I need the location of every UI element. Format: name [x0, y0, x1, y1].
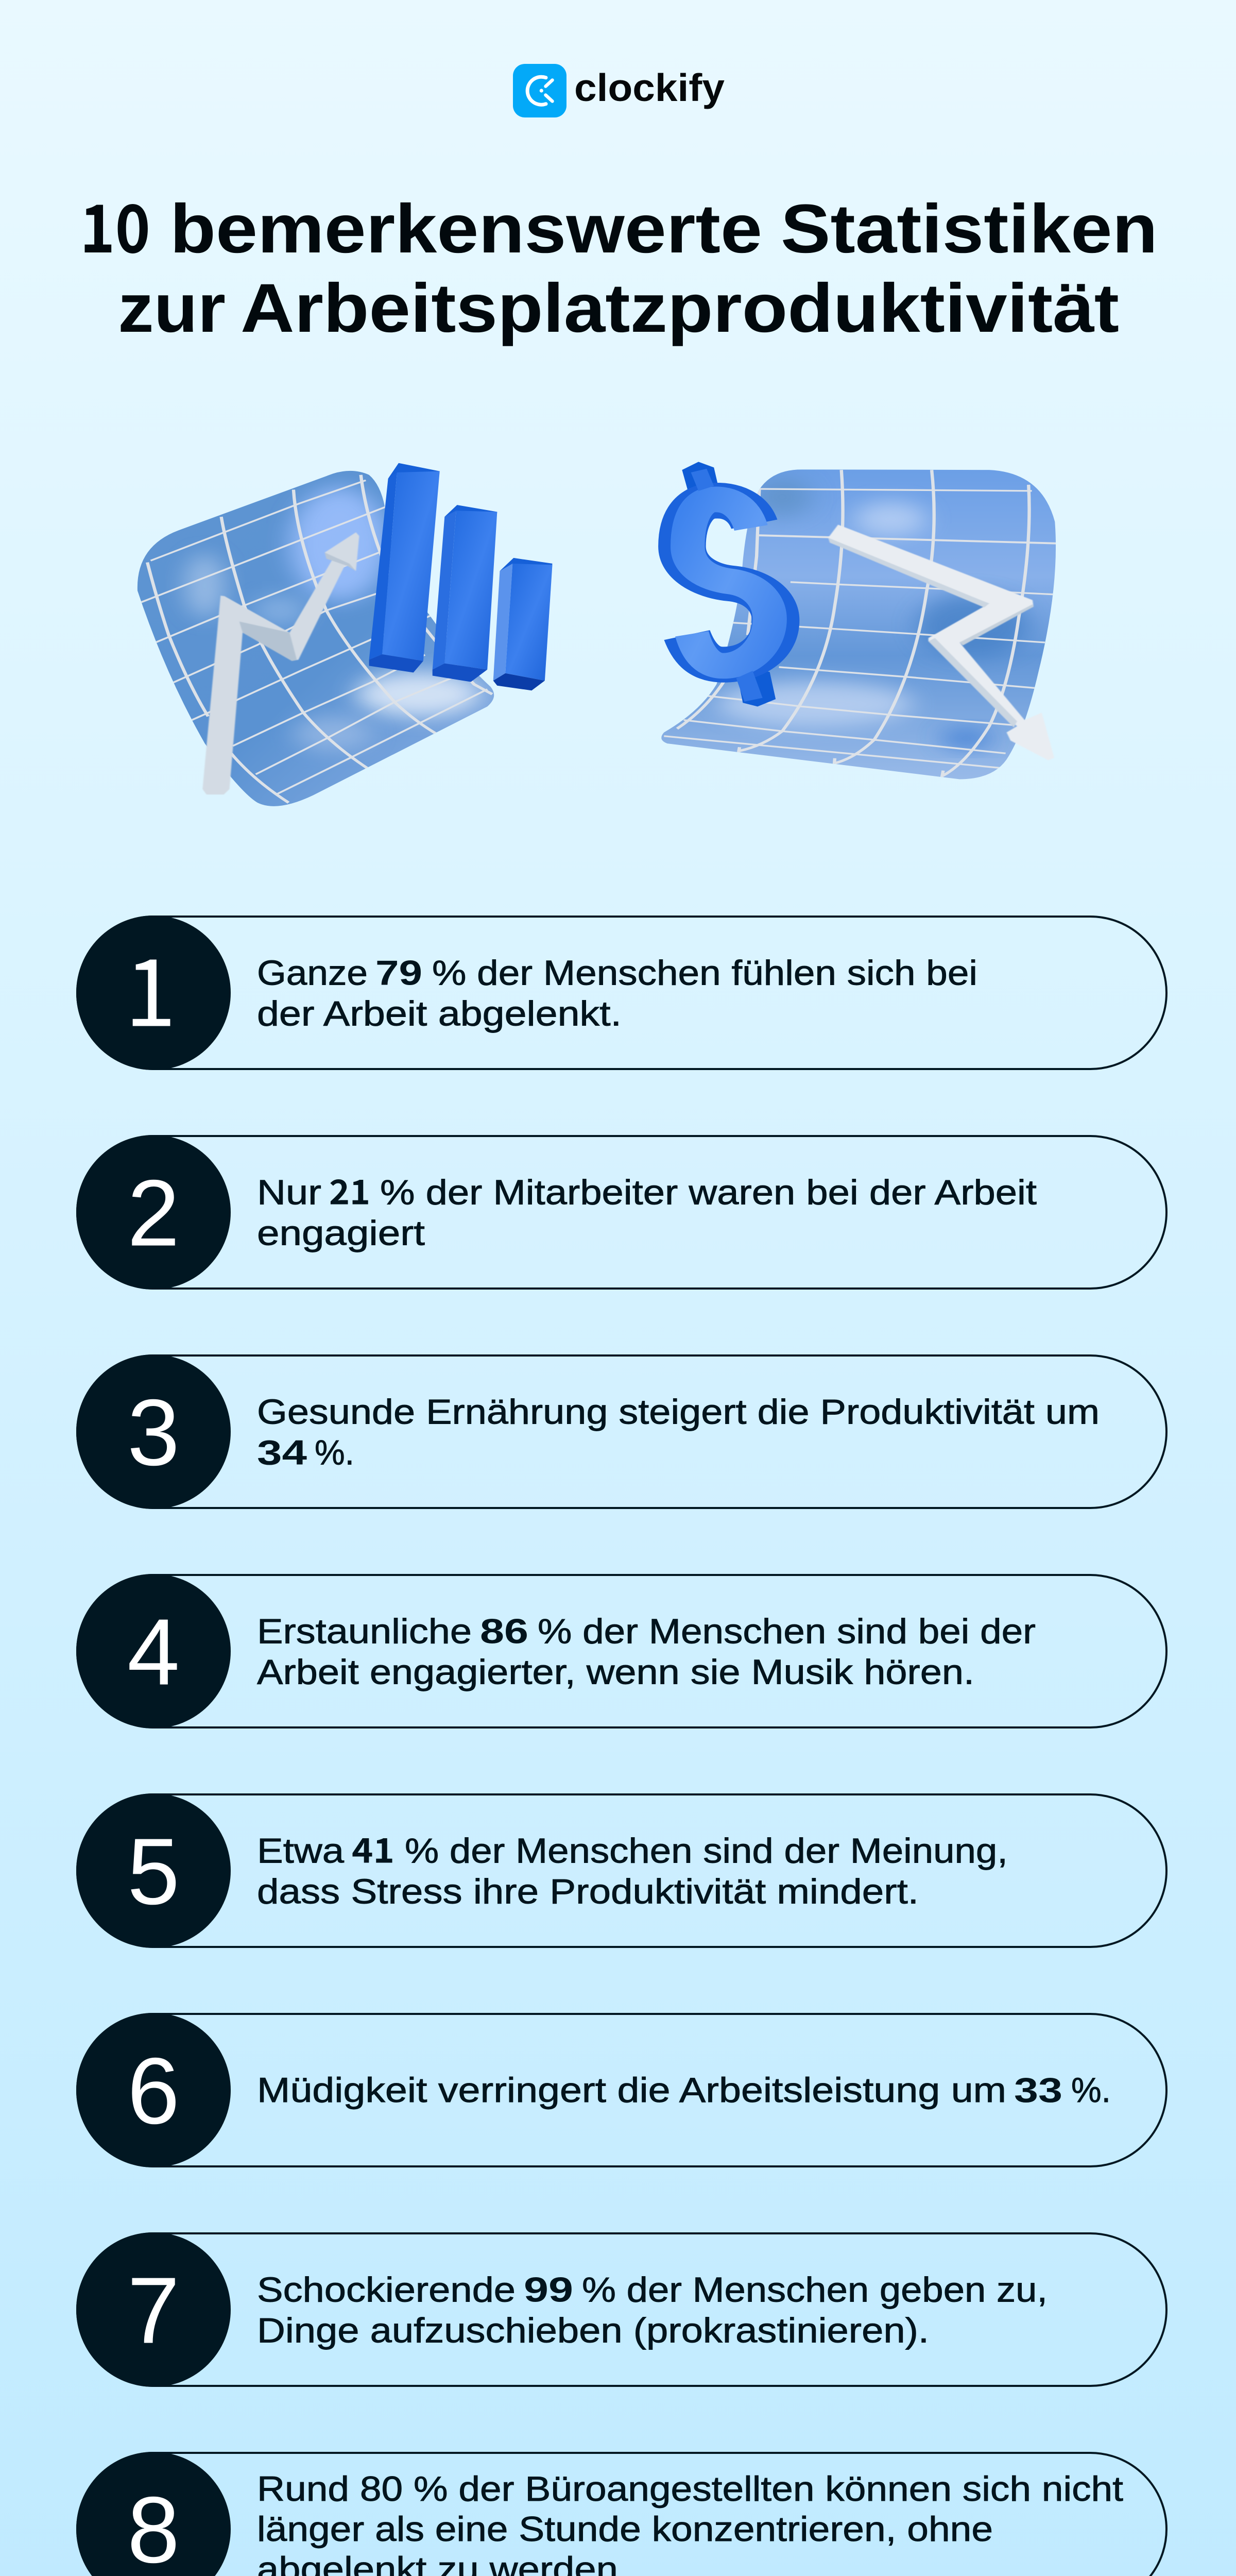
- illustration: rising chart with bars: [129, 463, 553, 812]
- text 4: 86: [480, 1612, 528, 1651]
- text 3: [257, 1392, 1100, 1472]
- text 8: länger als eine Stunde konzentrieren, ohne: [257, 2510, 993, 2549]
- number badge 2: 2: [127, 1160, 180, 1265]
- text 2: engagiert: [257, 1214, 425, 1253]
- arrow up: [202, 532, 359, 794]
- text 2: % der Mitarbeiter waren bei der Arbeit: [380, 1173, 1037, 1212]
- text 3: Gesunde Ernährung steigert die Produktivität um: [257, 1392, 1100, 1431]
- number badge 7: [76, 2232, 231, 2387]
- text 5: % der Menschen sind der Meinung,: [405, 1831, 1008, 1870]
- bars: [369, 463, 553, 690]
- text 7: Dinge aufzuschieben (prokrastinieren).: [257, 2311, 929, 2350]
- number badge 8: [76, 2452, 231, 2576]
- title: zur: [118, 270, 226, 347]
- text 7: % der Menschen geben zu,: [582, 2270, 1048, 2309]
- panel: statistic 8: [76, 2452, 1166, 2576]
- panel: statistic 7: [76, 2232, 1166, 2387]
- dollar sign: [682, 462, 776, 706]
- text 1: der Arbeit abgelenkt.: [257, 994, 622, 1033]
- arrow down: [828, 524, 1054, 760]
- wordmark: clockify: [574, 66, 725, 109]
- text 8: Rund 80 % der Büroangestellten können sich nicht: [257, 2469, 1123, 2509]
- number badge 4: 4: [127, 1599, 180, 1704]
- panel: statistic 5: [76, 1793, 1166, 1948]
- number badge 3: [76, 1354, 231, 1509]
- number badge 1: 1: [125, 918, 176, 1053]
- panel: statistic 4: [76, 1574, 1166, 1728]
- text 5: [257, 1824, 1008, 1911]
- text 4: Arbeit engagierter, wenn sie Musik hören.: [257, 1653, 974, 1692]
- number badge 2: [76, 1135, 231, 1290]
- text 4: [257, 1612, 1036, 1692]
- illustration: falling chart with dollar: [651, 462, 1065, 783]
- title: bemerkenswerte: [170, 191, 762, 267]
- icon: clockify clock: [513, 64, 566, 117]
- text 1: [257, 953, 977, 1033]
- text 8: [257, 2469, 1123, 2576]
- panel: statistic 2: [76, 1135, 1166, 1290]
- text 7: 99: [524, 2270, 573, 2309]
- text 6: 33: [1014, 2071, 1062, 2110]
- text 7: [257, 2270, 1048, 2350]
- glass grid panel: [129, 463, 507, 812]
- panel: statistic 3: [76, 1354, 1166, 1509]
- number badge 5: [76, 1793, 231, 1948]
- text 1: % der Menschen fühlen sich bei: [432, 953, 977, 992]
- text 5: dass Stress ihre Produktivität mindert.: [257, 1872, 919, 1911]
- text 5: 41: [352, 1824, 394, 1873]
- text 1: Ganze: [257, 953, 368, 992]
- text 6: Müdigkeit verringert die Arbeitsleistung um: [257, 2071, 1006, 2110]
- glass grid panel: [651, 465, 1065, 783]
- text 6: %.: [1071, 2071, 1111, 2110]
- number badge 4: [76, 1574, 231, 1728]
- number badge 1: [76, 916, 231, 1070]
- text 7: Schockierende: [257, 2270, 516, 2309]
- text 4: Erstaunliche: [257, 1612, 472, 1651]
- text 2: Nur: [257, 1173, 321, 1212]
- text 4: % der Menschen sind bei der: [538, 1612, 1036, 1651]
- logo: clockify: [513, 64, 725, 117]
- text 3: %.: [315, 1433, 354, 1472]
- text 2: [257, 1165, 1037, 1253]
- title: Arbeitsplatzproduktivität: [241, 270, 1119, 347]
- number badge 6: [76, 2013, 231, 2167]
- number badge 3: 3: [127, 1380, 180, 1485]
- number badge 5: 5: [127, 1819, 180, 1924]
- text 3: 34: [257, 1433, 307, 1472]
- text 2: 21: [329, 1165, 370, 1215]
- text 1: 79: [375, 953, 422, 992]
- panel: statistic 1: [76, 916, 1166, 1070]
- title: Statistiken: [781, 191, 1158, 267]
- title: 10: [80, 176, 150, 272]
- number badge 7: 7: [127, 2258, 180, 2363]
- number badge 6: 6: [127, 2038, 180, 2143]
- title: [80, 176, 1158, 347]
- panel: statistic 6: [76, 2013, 1166, 2167]
- text 5: Etwa: [257, 1831, 344, 1870]
